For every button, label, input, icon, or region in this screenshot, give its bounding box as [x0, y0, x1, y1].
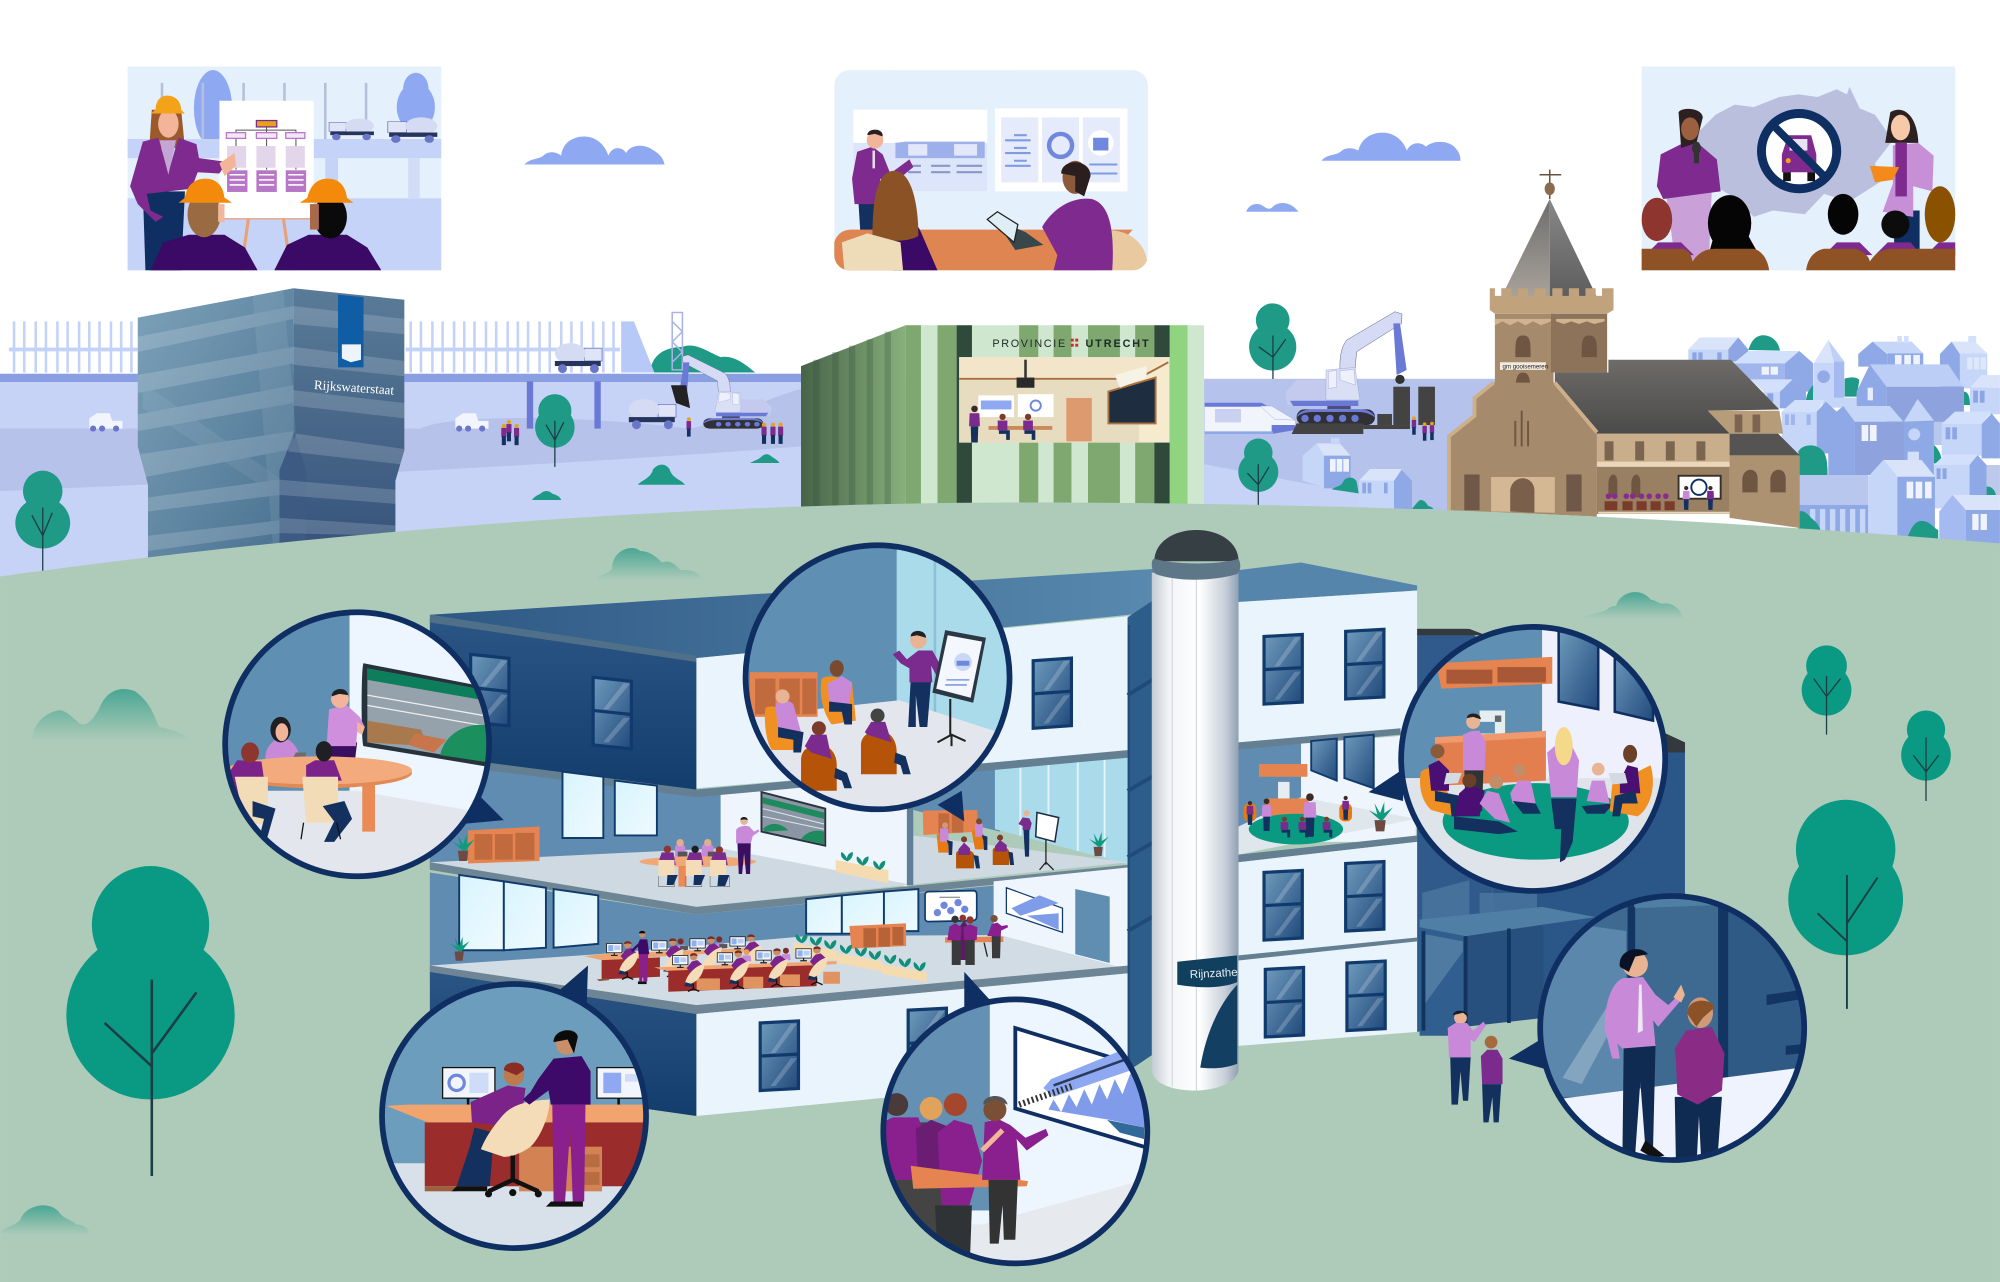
standing man [523, 1030, 591, 1207]
Provincie Utrecht building [801, 325, 1204, 510]
lower white front [696, 973, 1129, 1116]
train [1205, 403, 1295, 434]
small tree far right [1901, 710, 1951, 801]
cylinder tower [1152, 530, 1240, 1091]
coffee corner scene [1244, 764, 1352, 844]
seated man with chair [452, 1062, 550, 1197]
man in lilac shirt [1605, 949, 1685, 1166]
wall shelf [1436, 657, 1552, 689]
group at high table [945, 915, 1008, 965]
tree lower [1238, 439, 1278, 505]
right construction site, drawn in local scale [1205, 312, 1435, 510]
side white wall with door [994, 867, 1129, 971]
dome [1154, 530, 1239, 561]
small house [1359, 469, 1412, 510]
front row desks [654, 961, 840, 992]
cloud left [524, 136, 665, 165]
tower [1490, 288, 1614, 394]
building name text: UTRECHT [1085, 338, 1151, 350]
planter [836, 852, 888, 883]
entrance canopy [1420, 907, 1596, 1036]
panel: no-car public presentation [1642, 66, 1955, 270]
lower dark face [430, 972, 696, 1116]
small bush [1412, 500, 1433, 509]
interior windows [1311, 735, 1374, 788]
audience with brown seats [1642, 186, 1955, 270]
name plate: Rijnzathe [1190, 967, 1238, 981]
person 4 [982, 1096, 1048, 1244]
org chart board [219, 101, 314, 270]
bush on hill top [596, 548, 703, 580]
road display [362, 663, 495, 768]
back row houses [1688, 335, 1813, 408]
windows [1559, 630, 1653, 721]
bush right [1582, 592, 1684, 619]
seated man right [301, 741, 352, 842]
facade windows [471, 654, 1071, 1091]
man in helmet right [274, 179, 381, 270]
two men outside [1448, 1011, 1503, 1122]
seated person right [1582, 763, 1614, 814]
bush behind bridge [651, 346, 755, 372]
icon: truck [329, 119, 374, 140]
house near water [1303, 438, 1351, 488]
round table [226, 756, 412, 832]
cloud right [1321, 133, 1460, 161]
back row right houses [1857, 336, 2000, 423]
woman with orange paper [1870, 110, 1934, 255]
concrete foundation blocks [1292, 387, 1435, 434]
bush left [32, 689, 191, 741]
church sign: gm gooisemeren [1503, 364, 1548, 371]
tree near bridge [535, 394, 575, 467]
tree far left [15, 471, 70, 571]
panel: design review meeting [834, 70, 1148, 270]
ground floor back wall [430, 872, 1129, 972]
seated person centre [1510, 764, 1541, 814]
right building [1239, 562, 1417, 1046]
seated group with orange chairs [765, 660, 856, 753]
flip chart second floor [1036, 812, 1059, 870]
plant [453, 834, 474, 861]
icon: blue trees [194, 70, 435, 147]
city houses, drawn in local scale [1688, 335, 2000, 547]
big tree left [66, 866, 235, 1176]
main building [430, 569, 1154, 1116]
map blob [1694, 87, 1893, 217]
ground hill [0, 503, 2000, 1282]
cabinet [750, 672, 818, 717]
laptop [987, 212, 1043, 250]
road display on wall [761, 792, 825, 846]
people opposite at back row [677, 936, 727, 951]
right screen with charts [995, 108, 1128, 191]
person 2 [916, 1097, 954, 1256]
callout circle: workstation [376, 966, 652, 1255]
callout circle: meeting at round table [217, 606, 504, 893]
first floor planters [793, 934, 927, 982]
table [834, 230, 1133, 270]
first floor slab [430, 935, 1129, 1005]
standing supervisor [631, 931, 649, 984]
building name text: PROVINCIE [992, 338, 1067, 350]
band under upper floor [430, 750, 1129, 797]
building name text [992, 338, 1151, 350]
back row workers [607, 934, 762, 979]
blonde woman standing [1547, 727, 1579, 862]
plant lower [450, 937, 470, 961]
small workers [501, 417, 783, 445]
front row houses [1868, 452, 2000, 547]
colonnade hall [1798, 475, 1868, 545]
upper white front [696, 616, 1129, 788]
vans [89, 413, 489, 432]
presentation hall with audience [1598, 476, 1730, 513]
presenter [736, 817, 759, 874]
building name text: Rijkswaterstaat [314, 377, 395, 398]
middle row houses [1782, 399, 2000, 508]
bush by house [1332, 478, 1359, 493]
concrete mixer on ground [629, 399, 676, 429]
back wall windows [459, 875, 918, 950]
big tree right [1788, 800, 1903, 1009]
man in helmet left [151, 179, 258, 270]
interior scenes, drawn in local scale [639, 810, 1032, 982]
standing man [326, 689, 365, 758]
second floor windows [563, 772, 657, 838]
tower side [1128, 599, 1154, 1071]
upper dark face [430, 619, 696, 791]
man presenting [852, 130, 914, 230]
seated man left [230, 742, 276, 844]
excavator right [1286, 312, 1407, 425]
second floor lounge [923, 810, 1014, 868]
callout circle: people at rail model [878, 972, 1153, 1275]
fence left [9, 321, 620, 372]
cabinet upper left [468, 827, 540, 864]
train window screen [1015, 1028, 1148, 1148]
plant [1369, 802, 1393, 831]
coffee machine [1480, 710, 1508, 739]
nave roof [1555, 360, 1779, 434]
plant right [1089, 832, 1109, 856]
spire with weather vane [1501, 170, 1597, 297]
name plate [1177, 955, 1238, 987]
logo flag [338, 295, 364, 367]
second floor slab [430, 835, 1129, 907]
back row desks [584, 948, 747, 981]
Rijkswaterstaat building [138, 288, 404, 560]
callout circle: flipchart session [740, 541, 1015, 821]
green rug [1443, 783, 1629, 860]
teal bushes [532, 454, 779, 500]
callout circle: informal circle on rug [1369, 622, 1672, 899]
panel: site meeting with hard hats [128, 66, 441, 271]
two seated on rug [1454, 774, 1518, 834]
person 1 [883, 1093, 931, 1250]
presenter [893, 630, 939, 727]
person 3 [935, 1093, 982, 1275]
woman presenter in hard hat [130, 96, 236, 270]
monitors [443, 1068, 645, 1107]
lounge chairs from behind [801, 709, 911, 791]
process diagram screen [925, 891, 977, 922]
woman with microphone [1657, 109, 1721, 261]
concrete mixer on bridge [555, 343, 602, 373]
icon: concrete mixer [388, 117, 437, 143]
standing man at counter [1463, 713, 1486, 811]
landscape: mid-ground band left [0, 379, 1510, 585]
second floor presenter [1018, 810, 1032, 857]
computer workroom, drawn in local scale [584, 931, 840, 992]
tree top near excavator [1249, 303, 1296, 379]
nave walls [1597, 411, 1800, 528]
workers at foundation [1412, 416, 1434, 441]
no-car sign icon [1761, 114, 1837, 189]
table [911, 1166, 1028, 1189]
flipchart [932, 630, 986, 746]
tower body [1449, 383, 1597, 517]
second floor meeting table [639, 839, 756, 887]
second floor back walls [430, 753, 1129, 886]
left screen with train [853, 110, 987, 191]
windows [1264, 629, 1385, 1037]
clock tower back [1806, 340, 1859, 408]
back wing of building [1417, 629, 1685, 1036]
desk [386, 1105, 651, 1191]
first floor cabinet [849, 923, 906, 949]
seated woman left on orange chair [1420, 744, 1462, 816]
bush by church [1798, 445, 1828, 475]
roof [430, 569, 1154, 658]
people opposite at front row [743, 948, 791, 961]
small tree right [1802, 645, 1851, 735]
seated woman right on orange chair [1608, 745, 1653, 816]
crane lattice [672, 312, 682, 370]
man from behind [1675, 997, 1724, 1167]
church [1449, 170, 1800, 528]
bridge deck [0, 321, 801, 429]
woman seen from behind [842, 171, 938, 270]
counter [1435, 731, 1546, 786]
front row workers [673, 946, 828, 991]
bush bottom-left [0, 1205, 91, 1235]
excavator left [671, 355, 772, 429]
swoosh [1200, 985, 1237, 1068]
meeting room [959, 357, 1170, 443]
callout circle: two men at entrance [1509, 890, 1811, 1167]
cloud small [1246, 203, 1298, 212]
seated woman with laptop [265, 716, 306, 759]
man at laptop [1042, 161, 1148, 270]
